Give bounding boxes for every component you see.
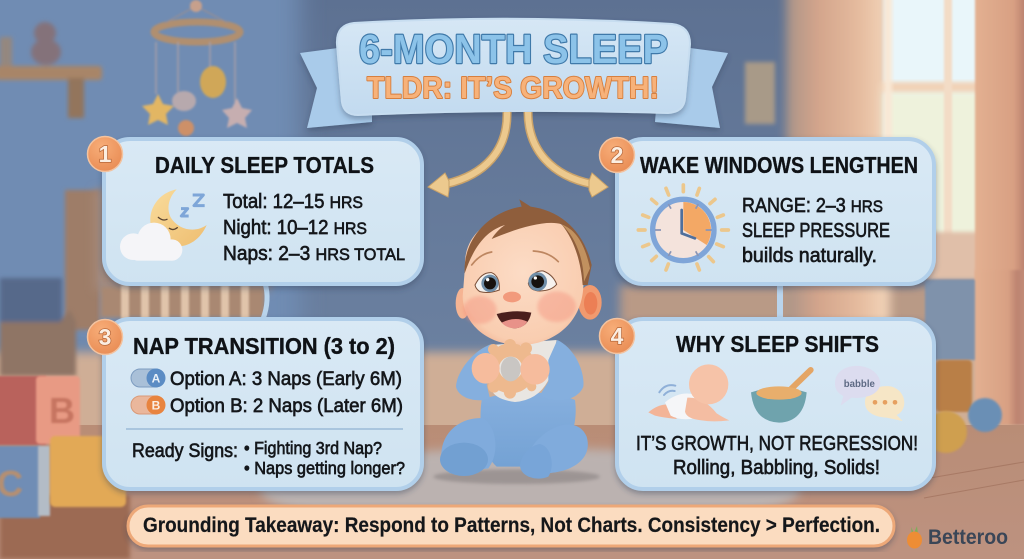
badge 3: 3 [99, 324, 111, 350]
left leg [441, 418, 495, 473]
right ear [578, 285, 602, 320]
baby shadow [433, 469, 600, 484]
logo wordmark: Betteroo [928, 526, 1008, 549]
left eye [475, 273, 499, 293]
badge 4: 4 [611, 323, 624, 349]
panel 2 sleep pressure line: SLEEP PRESSURE [742, 220, 890, 242]
toggle A: A [152, 372, 161, 386]
takeaway banner [128, 506, 894, 546]
panel 3: nap transition [104, 319, 422, 489]
baby illustration [433, 199, 602, 484]
right hand [520, 354, 550, 385]
left eyebrow [472, 252, 492, 265]
right arm [540, 340, 584, 400]
right eyebrow [533, 251, 558, 262]
badge 1 [88, 136, 122, 172]
left foot [440, 443, 488, 476]
teether [488, 339, 536, 399]
logo: Betteroo [907, 526, 1008, 549]
left ear [456, 288, 470, 319]
left hand [472, 353, 500, 384]
panel 4 heading: WHY SLEEP SHIFTS [676, 331, 879, 357]
nose [503, 292, 521, 302]
bib [492, 340, 557, 402]
right cheek [537, 291, 576, 322]
ready signs label: Ready Signs: [132, 441, 238, 462]
ready sign 1: • Fighting 3rd Nap? [244, 438, 382, 458]
icon: sleeping moon on cloud [120, 189, 207, 261]
shelf with teddy bear [0, 22, 102, 118]
growth statement: IT’S GROWTH, NOT REGRESSION! [636, 432, 918, 455]
right ribbon tail [655, 48, 728, 128]
panel 4: why sleep shifts [617, 319, 934, 489]
arrow to panel 2 [528, 112, 608, 197]
right eye [528, 271, 557, 291]
right foot [520, 444, 552, 479]
panel 1: daily sleep totals [104, 139, 422, 284]
panel 1 night line: Night: 10–12 HRS [223, 217, 367, 239]
option A text: Option A: 3 Naps (Early 6M) [170, 369, 402, 390]
badge 1: 1 [99, 141, 112, 167]
icon: babble speech bubbles: babble [844, 379, 876, 390]
panel 2: wake windows lengthen [617, 139, 934, 284]
badge 2: 2 [611, 142, 623, 168]
logo icon [907, 526, 922, 548]
hanging mobile [142, 0, 252, 136]
icon: crawling baby [648, 364, 729, 421]
icon: clock with sun rays [638, 185, 728, 270]
title line 1: 6-MONTH SLEEP [359, 26, 668, 72]
toy basket [0, 278, 76, 376]
panel 2 builds naturally line: builds naturally. [742, 245, 877, 267]
toy blocks [0, 376, 126, 518]
milestones line: Rolling, Babbling, Solids! [673, 457, 880, 479]
panel 1 total line: Total: 12–15 HRS [223, 191, 363, 213]
panel 2 heading: WAKE WINDOWS LENGTHEN [640, 152, 918, 178]
hair highlight [562, 224, 590, 282]
connector: panel 2 to panel 4 [777, 283, 783, 319]
torso [480, 392, 576, 467]
ready sign 2: • Naps getting longer? [244, 458, 405, 478]
panel 1 naps line: Naps: 2–3 HRS TOTAL [223, 243, 405, 265]
icon: bowl of food [751, 370, 811, 423]
left cheek [463, 296, 497, 324]
icon: babble speech bubbles [835, 366, 904, 421]
arrow to panel 1 [428, 112, 507, 197]
badge 3 [88, 320, 122, 354]
head [463, 213, 583, 345]
title line 2: TLDR: IT’S GROWTH! [367, 70, 659, 105]
panel 2 range line: RANGE: 2–3 HRS [742, 195, 883, 217]
toggle B: B [152, 398, 161, 412]
panel 3 heading: NAP TRANSITION (3 to 2) [133, 333, 395, 359]
left ribbon tail [300, 48, 372, 128]
mouth [497, 311, 531, 328]
toy balls and basket [925, 360, 1002, 453]
badge 2 [600, 138, 634, 172]
left arm [456, 344, 495, 400]
toy blocks: B [49, 390, 75, 431]
connector: panel 1 to panel 3 [263, 283, 267, 319]
title banner [337, 19, 690, 115]
option B text: Option B: 2 Naps (Later 6M) [170, 396, 403, 417]
badge 4 [600, 318, 634, 354]
hair [465, 199, 592, 285]
toggle A [131, 368, 166, 388]
takeaway text: Grounding Takeaway: Respond to Patterns, Not Charts. Consistency > Perfection. [143, 514, 880, 537]
right leg [530, 424, 588, 473]
panel 1 heading: DAILY SLEEP TOTALS [155, 152, 374, 178]
toggle B [131, 396, 166, 414]
